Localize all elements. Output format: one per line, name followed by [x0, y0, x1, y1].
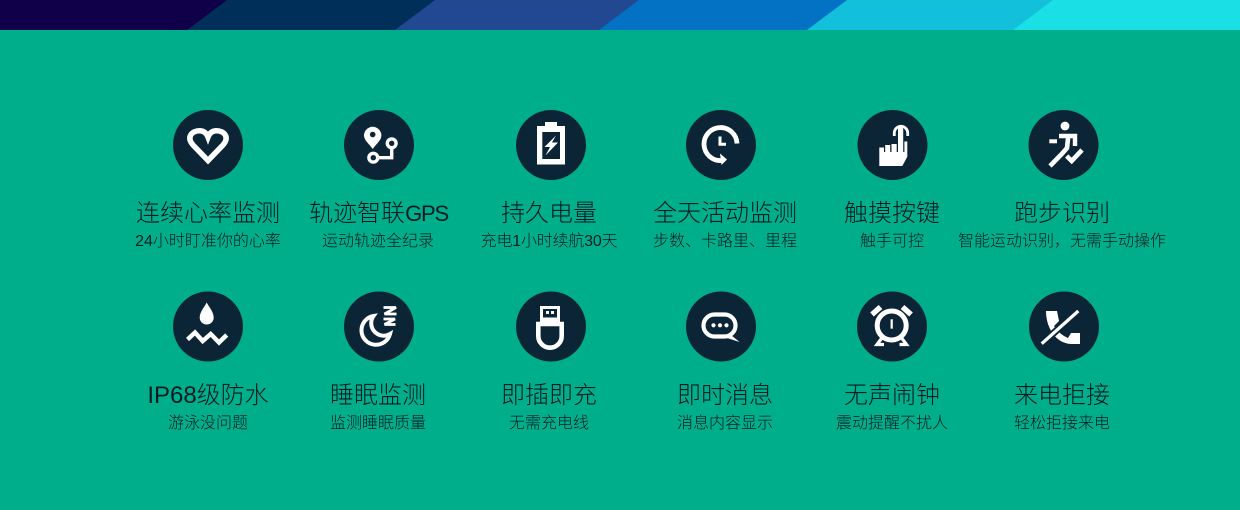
- icon: alarm clock: [857, 292, 927, 362]
- feature: run recognition: [958, 110, 1166, 250]
- feature: instant messages: [677, 292, 773, 432]
- feature: heart rate: 连续心率监测: [136, 200, 280, 227]
- feature: reject calls: [1014, 292, 1110, 432]
- icon: clock arrow: [686, 110, 756, 180]
- feature: GPS: [309, 110, 448, 250]
- feature: all-day tracking: 步数、卡路里、里程: [653, 232, 797, 250]
- feature: waterproof: IP68级防水: [147, 382, 269, 409]
- icon: battery: [516, 110, 586, 180]
- feature: instant messages: 消息内容显示: [677, 414, 773, 432]
- feature: plug and charge: 即插即充: [501, 382, 597, 409]
- feature: battery: 充电1小时续航30天: [481, 232, 618, 250]
- icon: USB plug: [516, 292, 586, 362]
- feature: touch keys: 触手可控: [860, 232, 924, 250]
- icon: speech bubble: [686, 292, 756, 362]
- feature: plug and charge: 无需充电线: [509, 414, 589, 432]
- icon: runner with check: [1028, 110, 1098, 180]
- feature: touch keys: 触摸按键: [844, 200, 940, 227]
- feature: silent alarm: [836, 292, 948, 432]
- icon: crossed phone: [1029, 292, 1099, 362]
- icon: water drop and waves: [173, 292, 243, 362]
- feature: silent alarm: 震动提醒不扰人: [836, 414, 948, 432]
- feature: all-day tracking: [653, 110, 797, 250]
- feature: heart rate: [135, 110, 281, 250]
- feature: GPS: 轨迹智联GPS: [309, 200, 448, 227]
- feature: sleep monitor: 睡眠监测: [330, 382, 426, 409]
- feature: touch keys: [844, 110, 940, 250]
- feature: sleep monitor: [330, 292, 426, 432]
- feature: sleep monitor: 监测睡眠质量: [330, 414, 426, 432]
- icon: route pin: [344, 110, 414, 180]
- icon: pointing hand: [858, 110, 928, 180]
- feature: reject calls: 轻松拒接来电: [1014, 414, 1110, 432]
- top colour band: [0, 0, 1240, 30]
- feature: silent alarm: 无声闹钟: [844, 382, 940, 409]
- feature: all-day tracking: 全天活动监测: [653, 200, 797, 227]
- feature: battery: 持久电量: [501, 200, 597, 227]
- feature: reject calls: 来电拒接: [1014, 382, 1110, 409]
- feature: plug and charge: [501, 292, 597, 432]
- icon: moon and z: [344, 292, 414, 362]
- feature: waterproof: 游泳没问题: [168, 414, 248, 432]
- icon: heart: [173, 110, 243, 180]
- feature: GPS: 运动轨迹全纪录: [322, 232, 434, 250]
- feature: run recognition: 跑步识别: [1014, 200, 1110, 227]
- feature: run recognition: 智能运动识别，无需手动操作: [958, 232, 1166, 250]
- feature: waterproof: [147, 292, 269, 432]
- feature: battery: [481, 110, 618, 250]
- feature: instant messages: 即时消息: [677, 382, 773, 409]
- feature: heart rate: 24小时盯准你的心率: [135, 232, 281, 250]
